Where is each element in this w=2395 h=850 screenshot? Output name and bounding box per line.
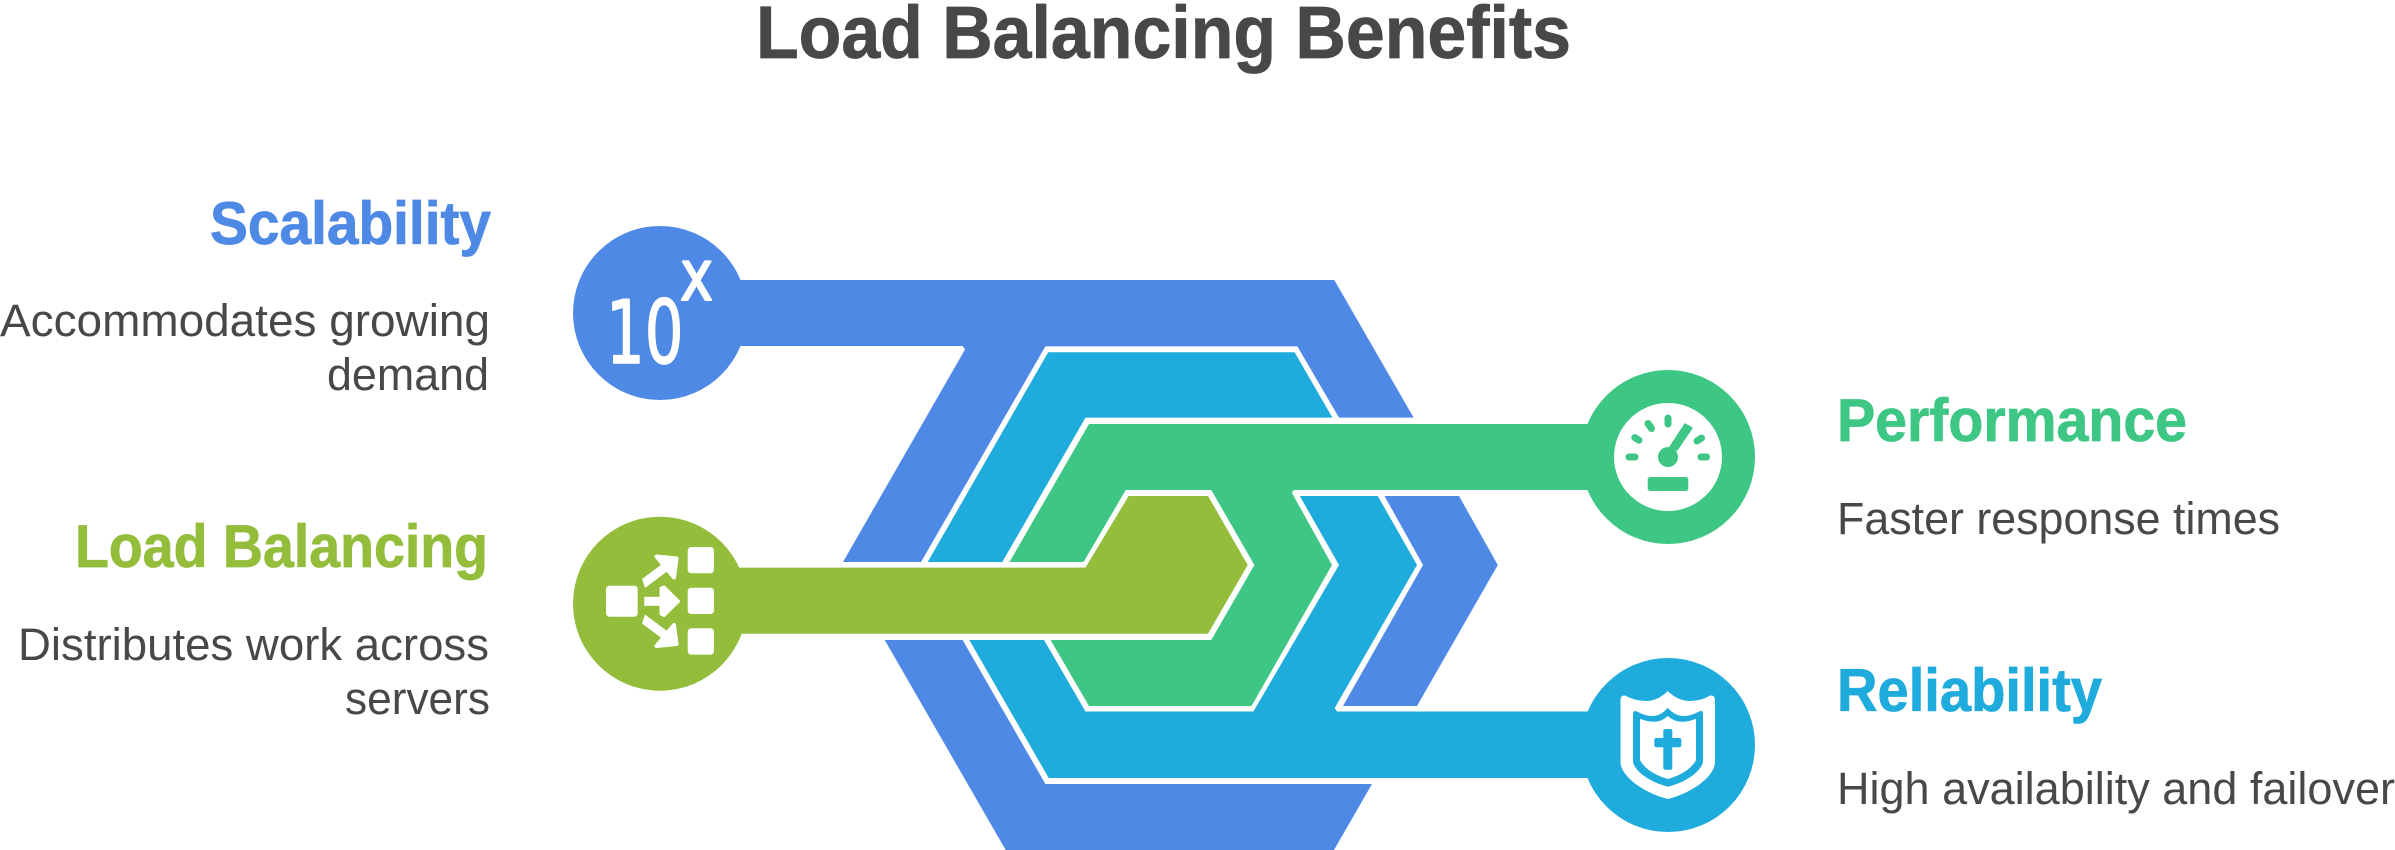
- text block: Scalability: [0, 190, 492, 400]
- icon: 10x: [606, 235, 713, 384]
- description: Reliability: High availability and failover: [1837, 763, 2395, 814]
- description: Scalability: demand: [327, 349, 489, 400]
- icon: shield with cross: [1620, 691, 1715, 799]
- heading: Reliability: Reliability: [1837, 657, 2103, 724]
- band: Load Balancing (olive hexagon): [573, 496, 1248, 691]
- description: Load Balancing: Distributes work across: [18, 619, 489, 670]
- icon: 10x: x: [680, 235, 713, 317]
- description: Load Balancing: [18, 619, 490, 724]
- text block: Load Balancing: [18, 513, 490, 724]
- band: Performance (green hexagon): [1010, 370, 1755, 706]
- band: Reliability (cyan hexagon): [928, 352, 1755, 832]
- description: Scalability: Accommodates growing: [0, 295, 490, 346]
- description: Scalability: [0, 295, 490, 400]
- description: Load Balancing: servers: [345, 673, 490, 724]
- description: Performance: Faster response times: [1837, 493, 2280, 544]
- heading: Load Balancing: Load Balancing: [75, 513, 488, 580]
- icon: speedometer: [1614, 403, 1722, 511]
- text block: Performance: [1837, 387, 2280, 544]
- icon: load distribution: [606, 547, 714, 655]
- icon: 10x: 10: [606, 282, 683, 384]
- band: Scalability (blue outer hexagon): [573, 226, 1498, 850]
- heading: Performance: Performance: [1837, 387, 2187, 454]
- text block: Reliability: [1837, 657, 2395, 814]
- heading: Scalability: Scalability: [210, 190, 492, 257]
